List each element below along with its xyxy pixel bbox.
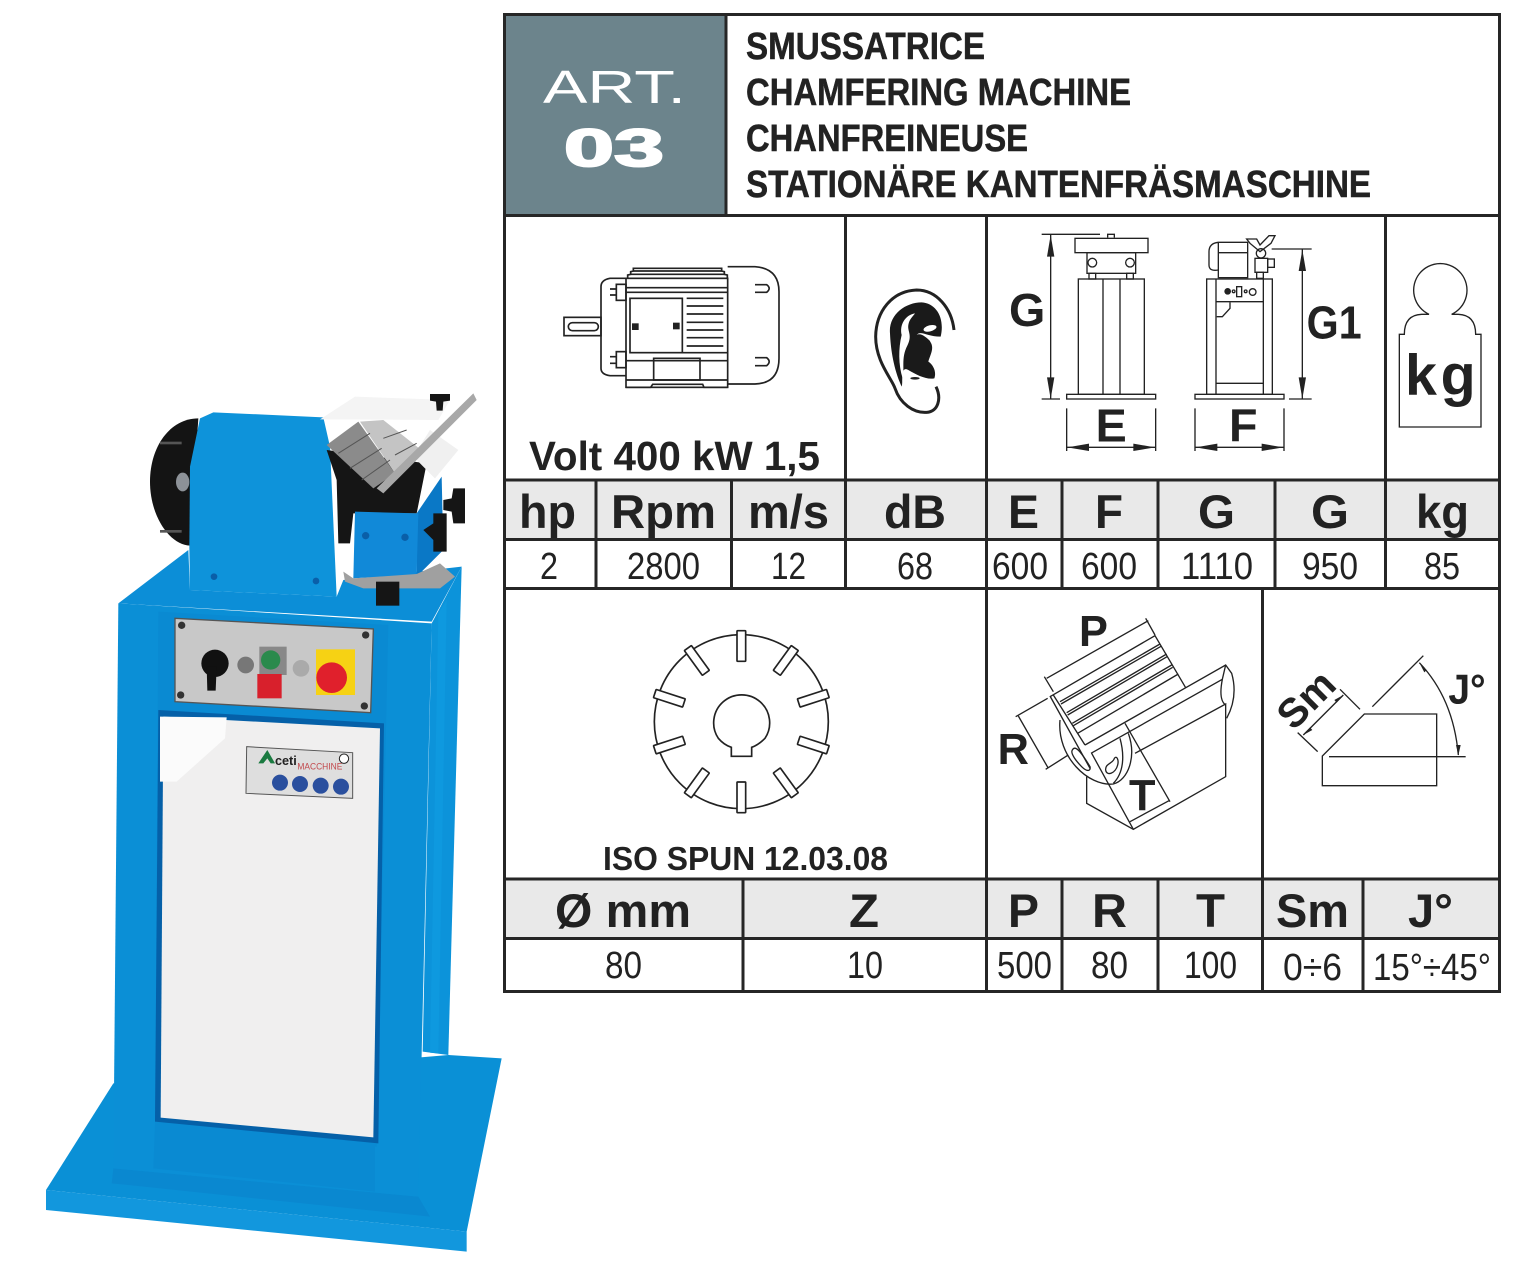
specifications table two values: 10	[847, 945, 883, 987]
specifications table two headings: P	[1008, 884, 1039, 937]
specifications table one headings: m/s	[748, 485, 829, 538]
specifications table one headings	[519, 485, 1469, 538]
dimension label G1: G1	[1307, 297, 1362, 349]
motor cell	[529, 267, 954, 479]
specifications table two headings: Z	[849, 884, 879, 937]
machine photo illustration	[46, 393, 502, 1252]
table capacity diagram	[998, 608, 1486, 829]
specifications table one values: 950	[1302, 546, 1358, 588]
work table and guards	[320, 393, 477, 493]
specifications table two values: 500	[997, 945, 1052, 987]
specifications table two headings: J°	[1408, 884, 1453, 937]
machine nameplate: ceti	[275, 754, 297, 768]
icon: ear	[876, 290, 954, 412]
product title in four languages	[746, 26, 1371, 206]
chamfer angle label: J°	[1448, 665, 1486, 712]
dimension label E: E	[1096, 400, 1127, 452]
specifications table two values: 100	[1184, 945, 1237, 987]
icon: chamfer profile	[1298, 656, 1466, 786]
cutter standard label: ISO SPUN 12.03.08	[603, 840, 888, 877]
dimension label G: G	[1009, 284, 1045, 336]
specifications table one values: 12	[771, 546, 806, 588]
specifications table two values: 0÷6	[1283, 947, 1342, 989]
specifications table one headings: kg	[1416, 485, 1469, 538]
side view diagram	[1195, 236, 1312, 451]
icon: weight	[1399, 264, 1481, 427]
specifications table two values	[605, 945, 1491, 989]
control panel	[175, 618, 373, 713]
dimension label P: P	[1079, 608, 1108, 656]
specifications table one headings: Rpm	[611, 485, 716, 538]
icon: cutter disc with ten teeth	[653, 631, 829, 813]
specifications table two values: 80	[1091, 945, 1128, 987]
specifications table one values: 600	[992, 546, 1048, 588]
dimension label R: R	[998, 726, 1029, 774]
dimensions and weight cell	[1009, 234, 1481, 452]
white door	[153, 717, 380, 1192]
weight unit label: kg	[1405, 344, 1476, 408]
specifications table one headings: F	[1095, 485, 1123, 538]
motor housing blue	[189, 412, 337, 597]
specifications table one values: 2800	[627, 546, 700, 588]
specifications table two headings: Sm	[1276, 884, 1349, 937]
specifications table one values: 85	[1424, 546, 1460, 588]
specifications table two values: 15°÷45°	[1373, 947, 1491, 989]
specifications table two headings: T	[1196, 884, 1225, 937]
specifications table two headings: Ø mm	[555, 884, 691, 937]
specifications table one values: 1110	[1181, 546, 1253, 588]
specifications table one headings: hp	[519, 485, 576, 538]
icon: chamfering table	[1016, 618, 1234, 829]
voltage and power label: Volt 400 kW 1,5	[529, 433, 820, 479]
specifications table one values: 68	[897, 546, 933, 588]
article number block	[505, 15, 726, 215]
art number: 03	[564, 119, 664, 178]
product title in four languages: CHANFREINEUSE	[746, 118, 1028, 160]
specifications table two headings	[555, 884, 1453, 937]
machine nameplate	[246, 747, 353, 798]
specifications table one headings: E	[1008, 485, 1039, 538]
cutter head	[327, 450, 465, 606]
art label: ART.	[543, 61, 686, 113]
specifications table two headings: R	[1092, 884, 1127, 937]
housing screws	[211, 573, 319, 584]
specifications table one headings: G	[1311, 485, 1349, 538]
specifications table one values: 2	[540, 546, 558, 588]
specifications table one values	[540, 546, 1460, 588]
specifications table one headings: G	[1198, 485, 1235, 538]
machine base plate	[46, 1055, 502, 1252]
product title in four languages: CHAMFERING MACHINE	[746, 72, 1131, 114]
product title in four languages: SMUSSATRICE	[746, 26, 985, 68]
specifications table one values: 600	[1081, 546, 1137, 588]
motor cover black	[150, 418, 198, 546]
specifications table one headings: dB	[884, 485, 946, 538]
chamfer size label: Sm	[1267, 661, 1345, 738]
machine column	[113, 550, 462, 1197]
machine nameplate: MACCHINE	[297, 761, 342, 771]
product title in four languages: STATIONÄRE KANTENFRÄSMASCHINE	[746, 163, 1371, 206]
specifications table two values: 80	[605, 945, 642, 987]
front view diagram	[1042, 234, 1156, 451]
dimension label F: F	[1229, 399, 1257, 451]
dimension label T: T	[1129, 772, 1155, 820]
icon: electric motor	[564, 267, 779, 387]
